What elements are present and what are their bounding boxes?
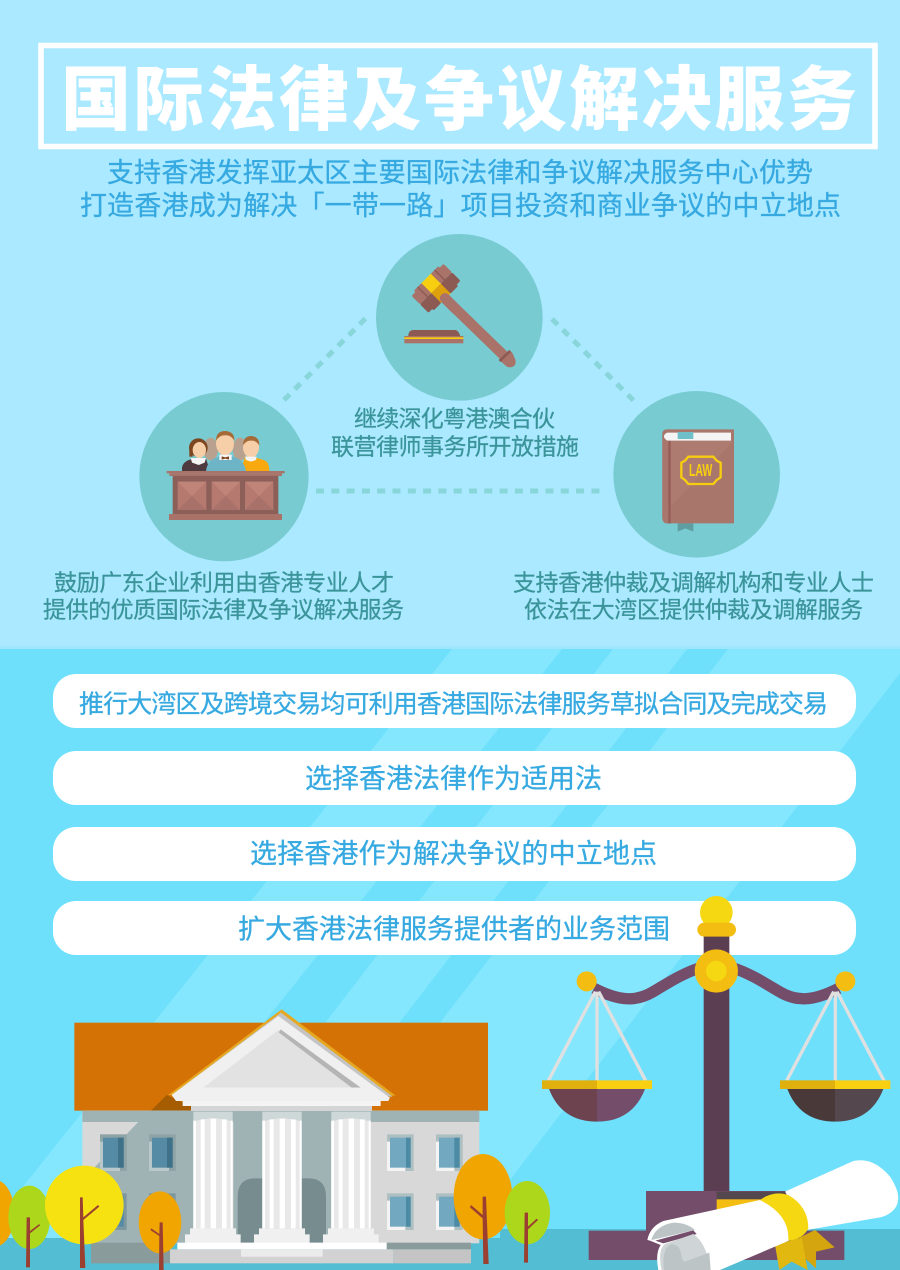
text: left [43,570,404,622]
text: left: 鼓励广东企业利用由香港专业人才 [54,570,394,596]
text: top: 继续深化粤港澳合伙 [354,406,555,432]
text: right: 支持香港仲裁及调解机构和专业人士 [513,570,874,596]
subtitle [80,158,841,221]
pill 2: 选择香港法律作为适用法 [305,764,602,794]
pill 4 [53,901,856,955]
icon: law book in circle [613,391,780,558]
pill 1: 推行大湾区及跨境交易均可利用香港国际法律服务草拟合同及完成交易 [79,690,828,718]
ground [0,1229,900,1270]
pill 3 [53,827,856,881]
dotted connector: left to top [284,318,366,400]
pill 4: 扩大香港法律服务提供者的业务范围 [238,914,670,944]
illustration: diploma scroll [647,1160,898,1270]
text: right [513,570,874,622]
icon: jury in circle [139,392,309,561]
trees: left group [0,1166,181,1270]
text: left: 提供的优质国际法律及争议解决服务 [43,596,404,622]
dotted connector: top to right [552,319,634,401]
subtitle: 打造香港成为解决「一带一路」项目投资和商业争议的中立地点 [80,191,841,221]
icon: law book in circle: LAW [689,460,712,480]
text: right: 依法在大湾区提供仲裁及调解服务 [524,596,863,622]
pill 1 [53,674,856,728]
pill 2 [53,751,856,805]
illustration: scales of justice [542,896,890,1260]
pill 3: 选择香港作为解决争议的中立地点 [250,839,657,869]
title: 国际法律及争议解决服务 [61,61,857,139]
trees: right group [454,1154,512,1264]
subtitle: 支持香港发挥亚太区主要国际法律和争议解决服务中心优势 [107,158,813,188]
text: top [331,406,579,460]
illustration: courthouse [74,1009,488,1263]
dotted connector: left to right [316,488,606,494]
text: top: 联营律师事务所开放措施 [331,434,579,460]
icon: gavel in circle [376,234,543,401]
tree: green right [505,1181,550,1263]
